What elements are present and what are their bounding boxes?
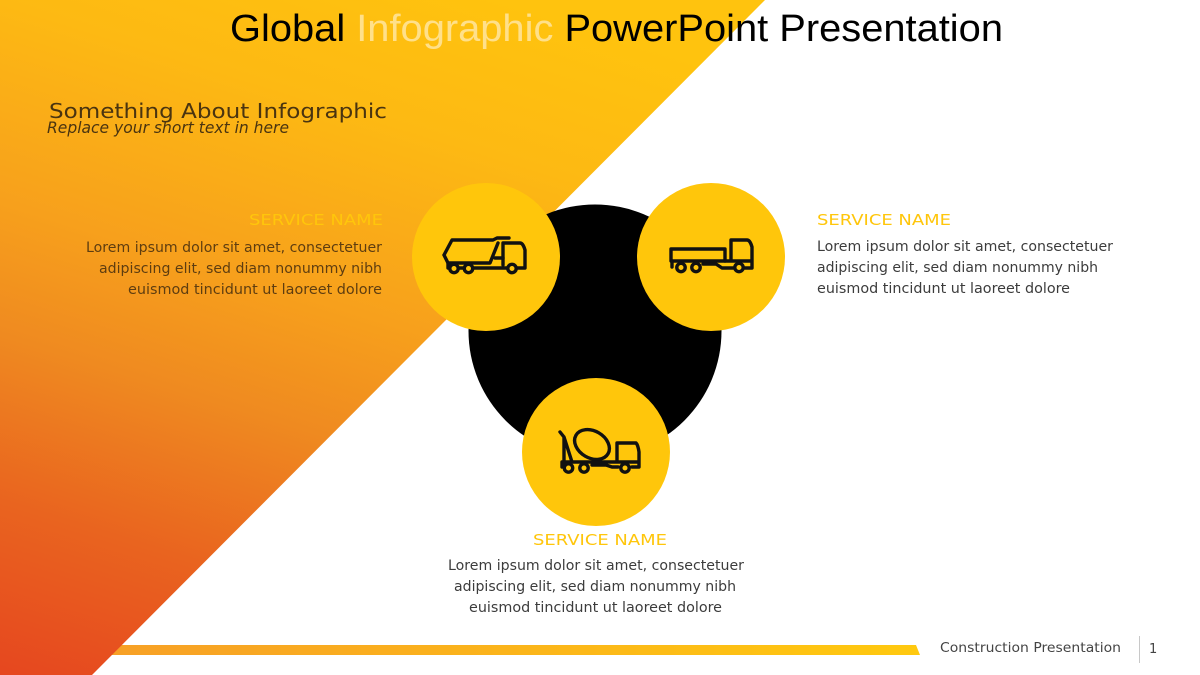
- service name: SERVICE NAME: [533, 531, 667, 549]
- description: adipiscing elit, sed diam nonummy nibh: [99, 260, 382, 277]
- background diagonal gradient panel: [0, 0, 765, 675]
- icon: concrete mixer truck: [560, 424, 639, 472]
- description: euismod tincidunt ut laoreet dolore: [469, 599, 722, 616]
- title: Global Infographic PowerPoint Presentation: [230, 8, 1003, 50]
- bottom service circle with mixer truck icon: [522, 378, 670, 526]
- description: euismod tincidunt ut laoreet dolore: [817, 280, 1070, 297]
- description: [448, 557, 744, 616]
- icon: flatbed truck: [671, 240, 752, 272]
- service name: SERVICE NAME: [249, 211, 383, 229]
- description: adipiscing elit, sed diam nonummy nibh: [454, 578, 736, 595]
- left service text: [86, 211, 383, 298]
- description: Lorem ipsum dolor sit amet, consectetuer: [448, 557, 744, 574]
- left service circle with dump truck icon: [412, 183, 560, 331]
- description: [817, 238, 1113, 297]
- bottom service text: [448, 531, 744, 616]
- icon: dump truck: [444, 238, 525, 273]
- right service circle with flatbed truck icon: [637, 183, 785, 331]
- description: euismod tincidunt ut laoreet dolore: [128, 281, 382, 298]
- subtitle tagline: Replace your short text in here: [47, 118, 289, 137]
- page number: 1: [1149, 642, 1157, 657]
- central black circle: [468, 204, 722, 458]
- description: Lorem ipsum dolor sit amet, consectetuer: [86, 239, 382, 256]
- service name: SERVICE NAME: [817, 211, 951, 229]
- description: Lorem ipsum dolor sit amet, consectetuer: [817, 238, 1113, 255]
- description: [86, 239, 382, 298]
- footer gradient bar: [100, 645, 920, 655]
- footer label: Construction Presentation: [940, 641, 1121, 656]
- description: adipiscing elit, sed diam nonummy nibh: [817, 259, 1098, 276]
- subtitle heading: Something About Infographic: [49, 99, 387, 123]
- right service text: [817, 211, 1113, 297]
